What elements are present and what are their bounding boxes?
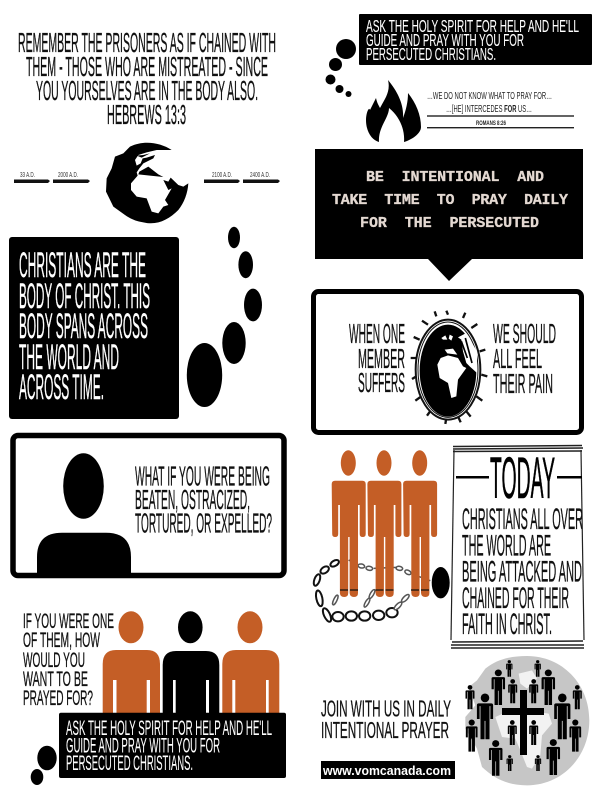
website badge: www.vomcanada.com — [322, 763, 451, 778]
title: Hebrews verse — [18, 27, 276, 130]
panel: body of Christ: ACROSS TIME. — [19, 368, 104, 407]
panel: body of Christ — [9, 237, 179, 419]
text: ASK THE HOLY SPIRIT FOR HELP AND HE'LL — [66, 717, 272, 740]
icon: globe with crown of thorns — [411, 311, 487, 424]
text: if you were one of them: WANT TO BE — [23, 668, 88, 691]
text: Romans verse: ROMANS 8:26 — [476, 120, 506, 127]
panel: today — [451, 446, 584, 648]
timeline left: 33 A.D. — [20, 172, 35, 179]
text: join with us: JOIN WITH US IN DAILY — [321, 696, 451, 722]
panel: when one member suffers — [314, 292, 582, 432]
text: BODY SPANS ACROSS — [19, 307, 148, 346]
callout: be intentional: TAKE TIME TO PRAY DAILY — [332, 192, 568, 209]
callout: be intentional: FOR THE PERSECUTED — [360, 215, 539, 232]
text: if you were one of them — [23, 610, 114, 710]
icon: flame — [366, 80, 421, 142]
callout: ask the Holy Spirit bottom: PERSECUTED CHRISTIANS. — [66, 752, 193, 775]
callout: ask the Holy Spirit bottom: GUIDE AND PRAY WITH YOU FOR — [66, 734, 220, 757]
text: BODY OF CHRIST. THIS — [19, 277, 150, 316]
text: Romans verse: …[HE] INTERCEDES FOR US… — [446, 104, 532, 115]
text: WHAT IF YOU WERE BEING — [135, 461, 270, 492]
text: if you were one of them: WOULD YOU — [23, 649, 85, 672]
text: TORTURED, OR EXPELLED? — [135, 508, 272, 539]
icon: globe — [106, 143, 197, 223]
callout: ask the Holy Spirit top: PERSECUTED CHRISTIANS. — [366, 44, 496, 64]
timeline right — [204, 172, 280, 183]
callout: ask the Holy Spirit bottom — [59, 713, 286, 778]
icon: ball — [432, 567, 450, 598]
callout: be intentional — [315, 149, 583, 281]
figures: three people — [103, 611, 279, 714]
text: CHRISTIANS ARE THE — [19, 246, 146, 285]
panel: when one member suffers: MEMBER — [358, 343, 405, 374]
text: if you were one of them: PRAYED FOR? — [23, 687, 93, 710]
timeline left: 2000 A.D. — [58, 172, 78, 179]
text: join with us: INTENTIONAL PRAYER — [321, 717, 449, 743]
text: if you were one of them: OF THEM, HOW — [23, 629, 100, 652]
panel: body of Christ: THE WORLD AND — [19, 338, 119, 377]
text: IF YOU WERE ONE — [23, 610, 114, 633]
callout: ask the Holy Spirit top — [359, 14, 592, 65]
thought bubbles: top — [326, 39, 356, 97]
figures: three chained prisoners — [332, 450, 437, 597]
title: Hebrews verse: HEBREWS 13:3 — [107, 99, 186, 130]
text: join with us — [321, 696, 451, 743]
callout: be intentional: BE INTENTIONAL AND — [366, 169, 544, 186]
text: BEATEN, OSTRACIZED, — [135, 484, 250, 515]
panel: what if — [13, 436, 284, 576]
timeline left — [14, 172, 90, 183]
icon: globe with people and cross — [465, 656, 589, 785]
timeline right: 2400 A.D. — [250, 172, 270, 179]
thought bubbles: bottom — [31, 746, 57, 785]
text: Romans verse — [427, 91, 574, 128]
panel: when one member suffers: WHEN ONE — [349, 318, 405, 349]
panel: when one member suffers: SUFFERS — [358, 367, 405, 398]
icon: chain — [312, 559, 430, 623]
timeline right: 2100 A.D. — [212, 172, 232, 179]
thought bubbles: body panel — [187, 227, 262, 407]
